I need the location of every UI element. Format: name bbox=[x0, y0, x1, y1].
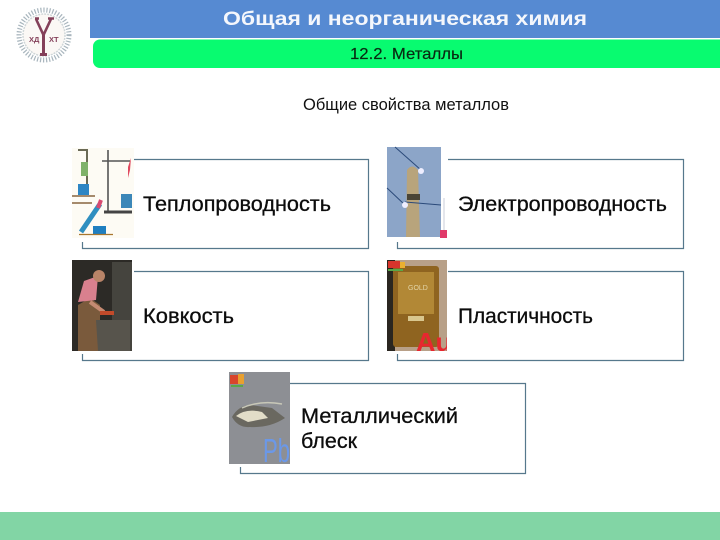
label: lustre: Металлический bbox=[301, 405, 458, 428]
panel: malleability: Ковкость bbox=[143, 305, 234, 328]
logo: university seal bbox=[19, 10, 69, 60]
icon: electric pole bbox=[387, 147, 447, 238]
panel: plasticity: Пластичность bbox=[458, 305, 593, 328]
header bar with course title bbox=[90, 0, 720, 38]
icon: lead sample bbox=[229, 372, 290, 469]
icon: gold bar bbox=[387, 260, 447, 351]
label: lustre: блеск bbox=[301, 430, 358, 453]
header bar with course title: Общая и неорганическая химия bbox=[223, 9, 587, 30]
logo: university seal: ХД bbox=[29, 35, 40, 44]
panel: plasticity bbox=[387, 260, 684, 360]
panel: electrical conductivity: Электропроводность bbox=[458, 193, 667, 216]
label: lustre bbox=[301, 405, 458, 453]
icon: gold bar: Au bbox=[416, 327, 452, 357]
icon: blacksmith photo bbox=[72, 260, 132, 351]
panel: electrical conductivity bbox=[387, 147, 684, 248]
green section bar: 12.2. Металлы bbox=[350, 46, 463, 63]
icon: lead sample: Pb bbox=[263, 432, 290, 469]
panel: thermal conductivity bbox=[72, 148, 368, 248]
icon: gold bar: GOLD bbox=[408, 285, 428, 292]
panel: metallic lustre bbox=[229, 372, 526, 474]
green section bar bbox=[93, 40, 720, 68]
logo: university seal: ХТ bbox=[49, 35, 59, 44]
footer band bbox=[0, 512, 720, 540]
icon: lab apparatus bbox=[72, 148, 134, 238]
panel: malleability bbox=[72, 260, 368, 360]
panel: thermal conductivity: Теплопроводность bbox=[143, 193, 331, 216]
heading: general properties: Общие свойства металлов bbox=[303, 96, 509, 114]
